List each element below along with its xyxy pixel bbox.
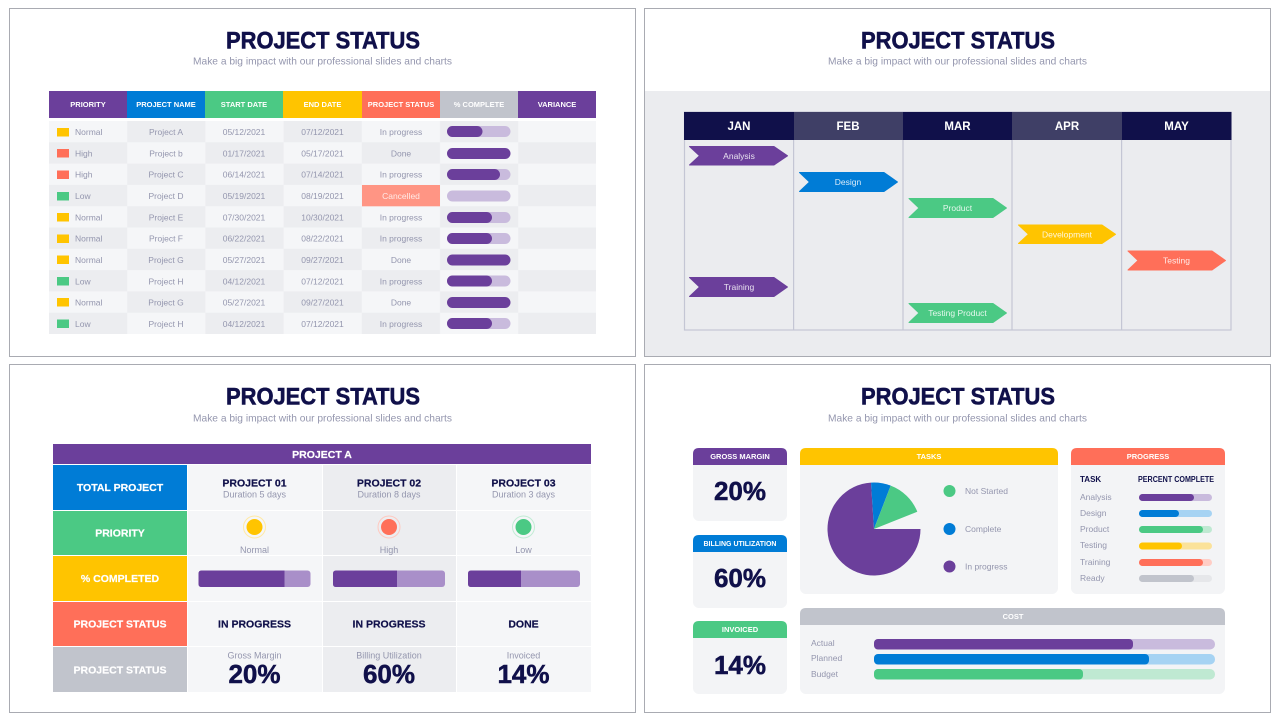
title: PROJECT STATUS	[226, 28, 420, 54]
column: Project 01: Duration 5 days	[223, 490, 287, 500]
row: Project A: Project A	[149, 127, 183, 137]
row: Project H: Low	[75, 276, 91, 286]
column: Project 01	[188, 465, 322, 692]
row: Project G: 09/27/2021	[301, 255, 344, 265]
panel: dashboard slide	[644, 364, 1270, 712]
row labels: PROJECT STATUS	[74, 664, 166, 676]
arrow: Product	[909, 198, 1006, 218]
row: Project G repeat: 05/27/2021	[223, 298, 266, 308]
row: Project A: Normal	[75, 127, 103, 137]
row: Project F	[57, 233, 510, 244]
row labels: PROJECT STATUS	[74, 618, 166, 630]
row: Project H: Project H	[149, 276, 183, 286]
row: Project H repeat	[57, 318, 510, 329]
arrow: Training	[690, 278, 788, 296]
progress rows	[1080, 492, 1212, 583]
row: Project G repeat: Done	[391, 298, 411, 308]
card: billing utilization: 60%	[714, 563, 766, 593]
arrow: Testing Product: Testing Product	[928, 308, 987, 318]
gantt grid	[684, 112, 1231, 330]
table header: % COMPLETE	[454, 100, 504, 109]
row: Project G: Project G	[148, 255, 184, 265]
card: invoiced	[693, 621, 787, 694]
column: Project 02: IN PROGRESS	[353, 618, 425, 630]
row: Project G	[57, 254, 510, 266]
pie chart	[828, 483, 920, 576]
row: Project H repeat: 04/12/2021	[223, 319, 266, 329]
pie legend	[944, 485, 1008, 572]
card: billing utilization	[693, 535, 787, 608]
month headers: MAR	[944, 121, 971, 133]
row: Project D: Project D	[149, 191, 183, 201]
column: Project 03: Low	[515, 545, 532, 555]
row: Project D: 08/19/2021	[301, 191, 344, 201]
progress rows: Training	[1080, 557, 1111, 567]
row: Project G repeat: 09/27/2021	[301, 298, 344, 308]
arrow: Testing: Testing	[1163, 256, 1190, 266]
arrow: Development: Development	[1042, 230, 1093, 240]
table header: PRIORITY	[70, 100, 106, 109]
column: Project 02	[323, 465, 456, 692]
row: Project D: Low	[75, 191, 91, 201]
row: Project D	[57, 185, 510, 206]
row: Project E: In progress	[380, 212, 422, 222]
subtitle: Make a big impact with our professional slides and charts	[828, 56, 1087, 68]
column: Project 03: Duration 3 days	[492, 490, 556, 500]
progress rows: Testing	[1080, 540, 1107, 550]
cost bars	[811, 638, 1215, 680]
row: Project G repeat: Normal	[75, 298, 103, 308]
row: Project G repeat	[57, 297, 510, 308]
row: Project E: 07/30/2021	[223, 212, 266, 222]
column: Project 01: PROJECT 01	[222, 478, 287, 490]
row labels: PRIORITY	[95, 528, 145, 540]
column: Project 01: IN PROGRESS	[218, 618, 291, 630]
row: Project b: Project b	[149, 148, 183, 158]
row: Project H	[57, 276, 510, 286]
row: Project b: 01/17/2021	[223, 148, 266, 158]
row labels	[53, 465, 187, 692]
row: Project C: Project C	[149, 170, 183, 180]
card: cost	[800, 608, 1225, 694]
card: gross margin	[693, 448, 787, 521]
row: Project b	[57, 148, 510, 159]
table header: VARIANCE	[538, 100, 576, 109]
month headers: MAY	[1164, 121, 1189, 133]
row: Project E: 10/30/2021	[301, 212, 344, 222]
row: Project A: 05/12/2021	[223, 127, 266, 137]
row: Project F: In progress	[380, 234, 422, 244]
column: Project 01: Normal	[240, 545, 269, 555]
row: Project F: Normal	[75, 234, 103, 244]
card: invoiced: INVOICED	[722, 625, 759, 634]
pie legend: Not Started	[965, 486, 1008, 496]
row labels: % COMPLETED	[81, 573, 160, 585]
arrow: Product: Product	[943, 203, 973, 213]
row: Project H repeat: Project H	[149, 319, 183, 329]
row labels: TOTAL PROJECT	[77, 482, 164, 494]
row: Project H: In progress	[380, 276, 422, 286]
month headers: JAN	[727, 121, 751, 133]
card: invoiced: 14%	[714, 650, 766, 680]
row: Project F: 06/22/2021	[223, 234, 266, 244]
row: Project G: 05/27/2021	[223, 255, 266, 265]
row: Project C: 07/14/2021	[301, 170, 344, 180]
column: Project 02: PROJECT 02	[357, 478, 421, 490]
table header: END DATE	[304, 100, 341, 109]
project banner: PROJECT A	[292, 449, 352, 461]
subtitle: Make a big impact with our professional slides and charts	[193, 412, 452, 424]
arrow: Design	[800, 172, 898, 192]
column: Project 03: 14%	[497, 659, 550, 689]
card: gross margin: 20%	[714, 476, 766, 506]
row: Project A: In progress	[380, 127, 422, 137]
column: Project 03: DONE	[508, 618, 539, 630]
row: Project b: 05/17/2021	[301, 148, 344, 158]
row: Project E	[57, 212, 510, 223]
progress rows: Design	[1080, 508, 1107, 518]
progress rows: Ready	[1080, 573, 1105, 583]
title: PROJECT STATUS	[226, 384, 420, 410]
row: Project b: High	[75, 148, 93, 158]
card: tasks: TASKS	[917, 452, 941, 461]
card: tasks	[800, 448, 1058, 594]
row: Project C	[57, 169, 510, 180]
column: Project 02: Duration 8 days	[357, 490, 421, 500]
project banner	[53, 444, 591, 464]
row: Project b: Done	[391, 148, 411, 158]
card: progress	[1071, 448, 1225, 594]
card: billing utilization: BILLING UTILIZATION	[704, 541, 776, 548]
cost bars: Planned	[811, 653, 842, 663]
card: progress: PERCENT COMPLETE	[1138, 475, 1215, 484]
month headers: APR	[1055, 121, 1080, 133]
row: Project A: 07/12/2021	[301, 127, 344, 137]
panel: project comparison slide	[10, 364, 636, 712]
pie legend: In progress	[965, 562, 1008, 572]
progress rows: Product	[1080, 524, 1110, 534]
title: PROJECT STATUS	[861, 28, 1055, 54]
arrow: Analysis	[690, 146, 788, 165]
column: Project 02: Billing Utilization	[356, 650, 422, 660]
pie legend: Complete	[965, 524, 1002, 534]
row: Project D: Cancelled	[382, 191, 420, 201]
column: Project 01: Gross Margin	[227, 650, 282, 660]
row: Project F: Project F	[149, 234, 183, 244]
month headers: FEB	[836, 121, 860, 133]
card: progress: TASK	[1080, 475, 1101, 484]
column: Project 03: PROJECT 03	[491, 478, 556, 490]
progress rows: Analysis	[1080, 492, 1112, 502]
column: Project 03	[457, 465, 591, 692]
arrow: Training: Training	[724, 282, 754, 292]
row: Project C: 06/14/2021	[223, 170, 266, 180]
row: Project H repeat: Low	[75, 319, 91, 329]
title: PROJECT STATUS	[861, 384, 1055, 410]
table header	[49, 91, 596, 118]
subtitle: Make a big impact with our professional slides and charts	[193, 56, 452, 68]
panel: gantt timeline slide	[644, 8, 1270, 356]
column: Project 01: 20%	[228, 659, 281, 689]
row: Project E: Project E	[149, 212, 184, 222]
cost bars: Actual	[811, 638, 835, 648]
arrow: Development	[1018, 225, 1116, 244]
row: Project G repeat: Project G	[148, 298, 184, 308]
arrow: Analysis: Analysis	[723, 151, 755, 161]
row: Project C: High	[75, 170, 93, 180]
row: Project H: 07/12/2021	[301, 276, 344, 286]
subtitle: Make a big impact with our professional slides and charts	[828, 412, 1087, 424]
arrow: Design: Design	[835, 177, 861, 187]
arrow: Testing	[1128, 251, 1226, 270]
column: Project 02: 60%	[363, 659, 415, 689]
cost bars: Budget	[811, 669, 839, 679]
row: Project G: Normal	[75, 255, 103, 265]
row: Project F: 08/22/2021	[301, 234, 344, 244]
month headers	[684, 112, 1232, 140]
card: progress: PROGRESS	[1127, 452, 1169, 461]
table header: START DATE	[221, 100, 267, 109]
row: Project A	[57, 126, 510, 137]
column: Project 02: High	[380, 545, 398, 555]
row: Project H repeat: In progress	[380, 319, 422, 329]
arrow: Testing Product	[909, 304, 1006, 322]
row: Project C: In progress	[380, 170, 422, 180]
table header: PROJECT NAME	[136, 100, 196, 109]
table header: PROJECT STATUS	[368, 100, 434, 109]
row: Project G: Done	[391, 255, 411, 265]
panel: priority table slide	[10, 8, 636, 356]
row: Project H: 04/12/2021	[223, 276, 266, 286]
column: Project 03: Invoiced	[507, 650, 540, 660]
row: Project D: 05/19/2021	[223, 191, 266, 201]
card: cost: COST	[1003, 612, 1024, 621]
row: Project E: Normal	[75, 212, 103, 222]
card: gross margin: GROSS MARGIN	[710, 452, 770, 461]
row: Project H repeat: 07/12/2021	[301, 319, 344, 329]
